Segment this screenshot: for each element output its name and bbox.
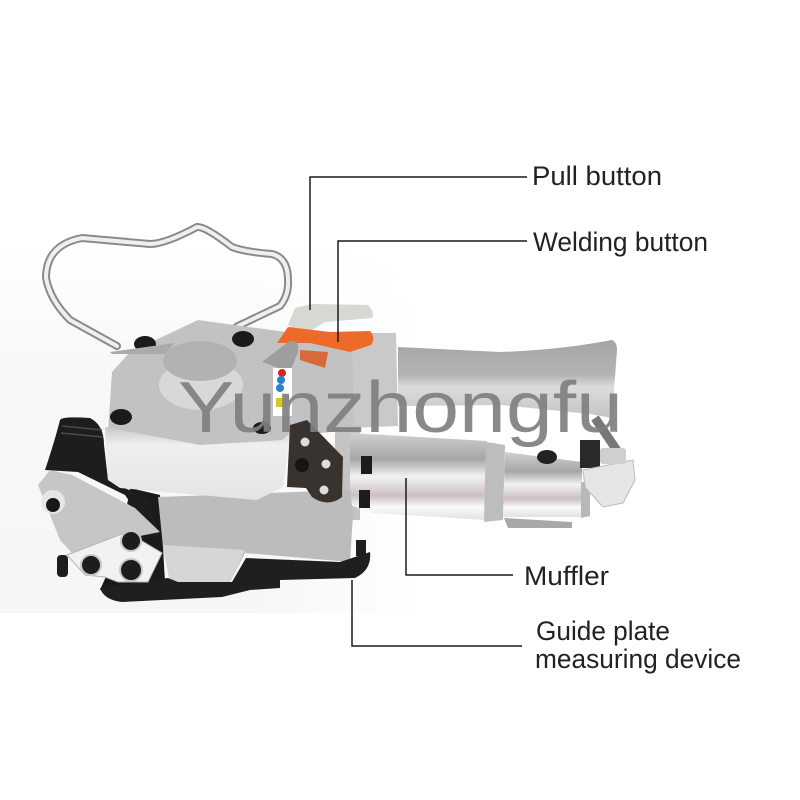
pull lever xyxy=(288,304,373,336)
dark plate xyxy=(287,420,343,502)
strapping tool xyxy=(38,227,635,602)
clamp plate xyxy=(57,531,162,582)
callout: welding button: Welding button xyxy=(533,227,708,257)
callout: guide plate measuring device: Guide plate xyxy=(536,616,670,646)
muffler cylinder xyxy=(350,433,590,528)
round cap xyxy=(159,341,243,410)
safety sticker xyxy=(273,368,292,416)
black frame behind clamp xyxy=(100,488,165,590)
hose and elbow fitting xyxy=(580,418,635,507)
watermark: Yunzhongfu xyxy=(178,368,623,448)
callout: pull button xyxy=(310,161,662,310)
callout: welding button xyxy=(338,227,708,342)
black base and guide plate xyxy=(100,552,370,602)
roller ribs xyxy=(61,426,103,437)
top housing xyxy=(108,320,354,446)
black roller xyxy=(45,417,160,545)
rear grip xyxy=(398,340,617,418)
body backing behind plate xyxy=(335,425,360,520)
lever pivot xyxy=(262,341,298,372)
side arm xyxy=(38,470,160,553)
grip neck xyxy=(345,333,398,428)
screws on housing xyxy=(110,331,271,434)
callout: guide plate measuring device xyxy=(352,580,741,674)
callout: muffler xyxy=(406,478,609,591)
orange welding lever xyxy=(277,327,373,352)
callout: pull button: Pull button xyxy=(532,161,662,191)
lower body xyxy=(158,490,353,582)
callout: guide plate measuring device: measuring device xyxy=(535,644,741,674)
callout: muffler: Muffler xyxy=(524,561,609,591)
handle bracket xyxy=(110,343,175,354)
arm nut xyxy=(41,490,65,514)
band housing xyxy=(105,427,290,500)
wire handle xyxy=(46,227,288,346)
